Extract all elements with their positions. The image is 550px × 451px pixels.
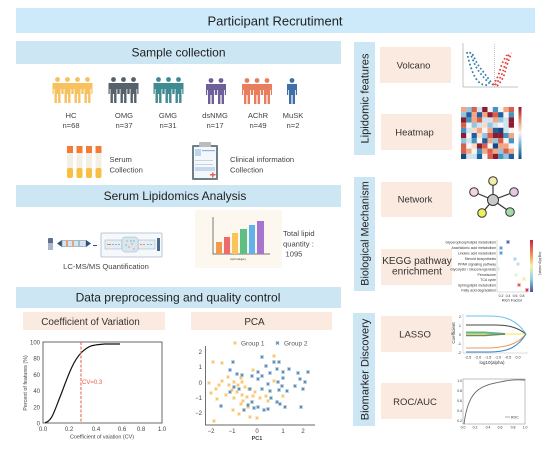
icon group: GMG participants: GMG [159,111,177,120]
chart: ROC curve: 0.4 [486,426,490,430]
chart: KEGG bubble plot: Rich Factor [502,298,523,302]
icon group: OMG participants: n=37 [115,121,133,130]
chart: lipid bar chart [195,210,282,268]
text: LASSO axis labels: -2.0 [475,356,481,360]
chart: KEGG bubble plot: Arachidonic acid metabolism [451,246,496,250]
chart: KEGG bubble plot: Linoleic acid metabolism [458,252,496,256]
box: KEGG pathway enrichment [381,249,453,285]
icon: serum tubes [67,146,102,178]
icon: clipboard [192,142,218,180]
box: Volcano: Volcano [397,60,430,72]
chart: KEGG bubble plot: Fatty acid degradation [461,288,496,292]
section label: Biomarker Discovery: Biomarker Discovery [360,318,372,420]
chart: coefficient of variation curve: 0.4 [92,427,101,433]
icon group: MuSK participants: MuSK [283,111,303,120]
chart: coefficient of variation curve: 1.0 [158,427,167,433]
chart: PCA scatter: 0 [199,381,203,387]
chart: PCA scatter: 2 [199,350,203,356]
chart: KEGG bubble plot: 0.6 [513,294,517,298]
icon group: GMG participants [154,77,184,130]
chart: heatmap [461,107,522,159]
box: ROC/AUC: ROC/AUC [393,397,437,408]
icon group: AChR participants [242,78,272,130]
chart: PCA scatter: Group 2 [284,340,308,348]
box: LASSO: LASSO [399,330,431,340]
chart: coefficient of variation curve [23,340,167,440]
chart: PCA scatter: −1 [195,396,203,402]
heading: Serum Lipidomics Analysis [16,185,341,207]
text: LASSO axis labels: -1 [458,342,461,346]
icon group: HC participants: HC [66,111,77,120]
chart: PCA scatter: 0 [255,429,259,435]
box: Network [381,182,452,217]
text: LASSO axis labels: 1 [459,324,461,328]
chart: coefficient of variation curve: 60 [33,373,41,379]
chart: coefficient of variation curve: CV=0.3 [82,380,103,386]
icon group: HC participants [52,77,92,130]
text: LASSO axis labels: -0.5 [505,356,511,360]
chart: KEGG bubble plot: -log10(p-value) [538,251,542,275]
icon group: MuSK participants [283,78,303,130]
chart: ROC curve: 0.8 [457,389,462,393]
text: LASSO axis labels [451,315,521,365]
panel heading: PCA [191,312,332,330]
text: LASSO axis labels: 2 [459,315,461,319]
chart: KEGG bubble plot: Sphingolipid metabolism [458,284,496,288]
section label: Lipidomic features: Lipidomic features [360,53,372,144]
icon group: dsNMG participants [202,78,228,130]
chart: PCA scatter: −2 [208,429,215,435]
chart: coefficient of variation curve: 0.6 [118,427,127,433]
text: total lipid quantity: quantity : [283,240,314,248]
chart: PCA scatter: 1 [199,365,203,371]
text: LASSO axis labels: -1.5 [485,356,491,360]
diagram: network [470,177,518,217]
box: ROC/AUC [381,383,452,419]
icon group: OMG participants: OMG [115,111,133,120]
chart: KEGG bubble plot: 0.4 [506,294,510,298]
text: LASSO axis labels: -1.0 [495,356,501,360]
text: Clinical information Collection [230,155,294,174]
chart: volcano plot [463,43,518,87]
text: Serum Collection: Collection [110,166,143,174]
text: total lipid quantity: Total lipid [283,229,315,238]
section label: Biomarker Discovery [353,313,375,426]
chart: coefficient of variation curve: 0 [37,422,41,428]
heading: Sample collection: Sample collection [131,46,226,60]
box: KEGG pathway enrichment: KEGG pathway [382,256,453,267]
chart: ROC curve [457,379,527,430]
chart: KEGG bubble plot: Glycolysis / Gluconeogenesis [450,268,496,272]
box: KEGG pathway enrichment: enrichment [392,266,442,278]
chart: KEGG bubble plot: PPAR signaling pathway [458,262,496,266]
chart: ROC curve: 0.4 [457,409,462,413]
text: Clinical information Collection: Collection [230,166,263,174]
box: LASSO [381,316,452,352]
chart: LASSO coefficient paths [463,314,528,353]
chart: KEGG bubble plot: 0.8 [520,294,524,298]
chart: ROC curve: 0.0 [461,426,465,430]
panel heading: PCA: PCA [244,317,265,328]
chart: PCA scatter: 1 [281,429,285,435]
chart: coefficient of variation curve: 40 [33,389,41,395]
icon group: GMG participants: n=31 [159,121,177,130]
title bar: Participant Recruitment [16,8,535,33]
section label: Biological Mechanism: Biological Mechanism [360,181,372,286]
box: Network: Network [398,194,433,206]
text: Serum Collection [110,155,143,174]
chart: KEGG bubble plot: 0.2 [499,294,503,298]
chart: coefficient of variation curve: 80 [33,356,41,362]
title bar: Participant Recruitment: Participant Recrutiment [207,14,343,28]
chart: PCA scatter: Group 1 [241,340,265,348]
text: LASSO axis labels: 0 [459,333,461,337]
text: Clinical information Collection: Clinical information [230,155,294,164]
chart: ROC curve: 1.0 [523,426,527,430]
heading: Data preprocessing and quality control: Data preprocessing and quality control [76,290,280,304]
panel heading: Coefficient of Variation [23,312,165,330]
text: LASSO axis labels: Coefficient [451,322,456,344]
section label: Lipidomic features [354,42,375,155]
icon group: MuSK participants: n=2 [287,121,299,130]
text: total lipid quantity [283,229,315,258]
heading: Sample collection [16,41,341,64]
chart: PCA scatter [195,340,315,442]
chart: ROC curve: 0.6 [457,399,462,403]
box: Heatmap: Heatmap [395,128,434,138]
chart: lipid bar chart: Lipid category [230,258,247,261]
chart: KEGG bubble plot: TCA cycle [480,278,496,282]
heading: Serum Lipidomics Analysis: Serum Lipidomics Analysis [104,189,246,203]
chart: ROC curve: 0.2 [473,426,477,430]
text: LC-MS/MS Quantification: LC-MS/MS Quantification [63,262,149,271]
chart: KEGG bubble plot [445,240,542,302]
chart: ROC curve: 0.6 [498,426,502,430]
heading: Data preprocessing and quality control [16,287,341,308]
panel heading: Coefficient of Variation: Coefficient of Variation [41,317,140,328]
chart: coefficient of variation curve: 100 [30,340,41,346]
chart: ROC curve: 0.8 [511,426,515,430]
diagram: LC-MS/MS instrument [48,233,162,257]
icon group: HC participants: n=68 [62,121,80,130]
chart: KEGG bubble plot: Steroid biosynthesis [465,257,496,261]
chart: PCA scatter: −2 [195,411,203,417]
box: Volcano [380,47,451,83]
text: LASSO axis labels: 0.0 [515,356,521,360]
chart: PCA scatter: −1 [229,429,236,435]
chart: PCA scatter: 2 [301,429,305,435]
chart: PCA scatter: PC1 [252,436,262,442]
icon group: OMG participants [108,77,138,130]
box: Heatmap [381,114,452,150]
chart: ROC curve: ROC [511,416,519,420]
chart: ROC curve: 0.2 [457,419,462,423]
chart: coefficient of variation curve: 0.8 [137,427,146,433]
icon group: AChR participants: AChR [248,111,269,120]
icon group: dsNMG participants: dsNMG [202,111,228,120]
icon group: AChR participants: n=49 [249,121,267,130]
chart: coefficient of variation curve: 0.2 [65,427,74,433]
text: total lipid quantity: 1095 [286,250,302,258]
chart: ROC curve: 1.0 [457,379,462,383]
chart: KEGG bubble plot: Peroxisome [478,273,496,277]
chart: KEGG bubble plot: Glycerophospholipid metabolism [445,240,496,244]
section label: Biological Mechanism [354,177,375,291]
text: Serum Collection: Serum [110,155,132,164]
text: LASSO axis labels: -2 [458,351,461,355]
text: LASSO axis labels: log10(alpha) [479,360,505,365]
chart: coefficient of variation curve: 0.0 [39,427,48,433]
text: LASSO axis labels: -2.5 [465,356,471,360]
chart: coefficient of variation curve: Coefficient of vaiation (CV) [70,434,134,440]
chart: coefficient of variation curve: Percent of features (%) [23,355,29,411]
icon group: dsNMG participants: n=17 [206,121,224,130]
chart: coefficient of variation curve: 20 [33,406,41,412]
